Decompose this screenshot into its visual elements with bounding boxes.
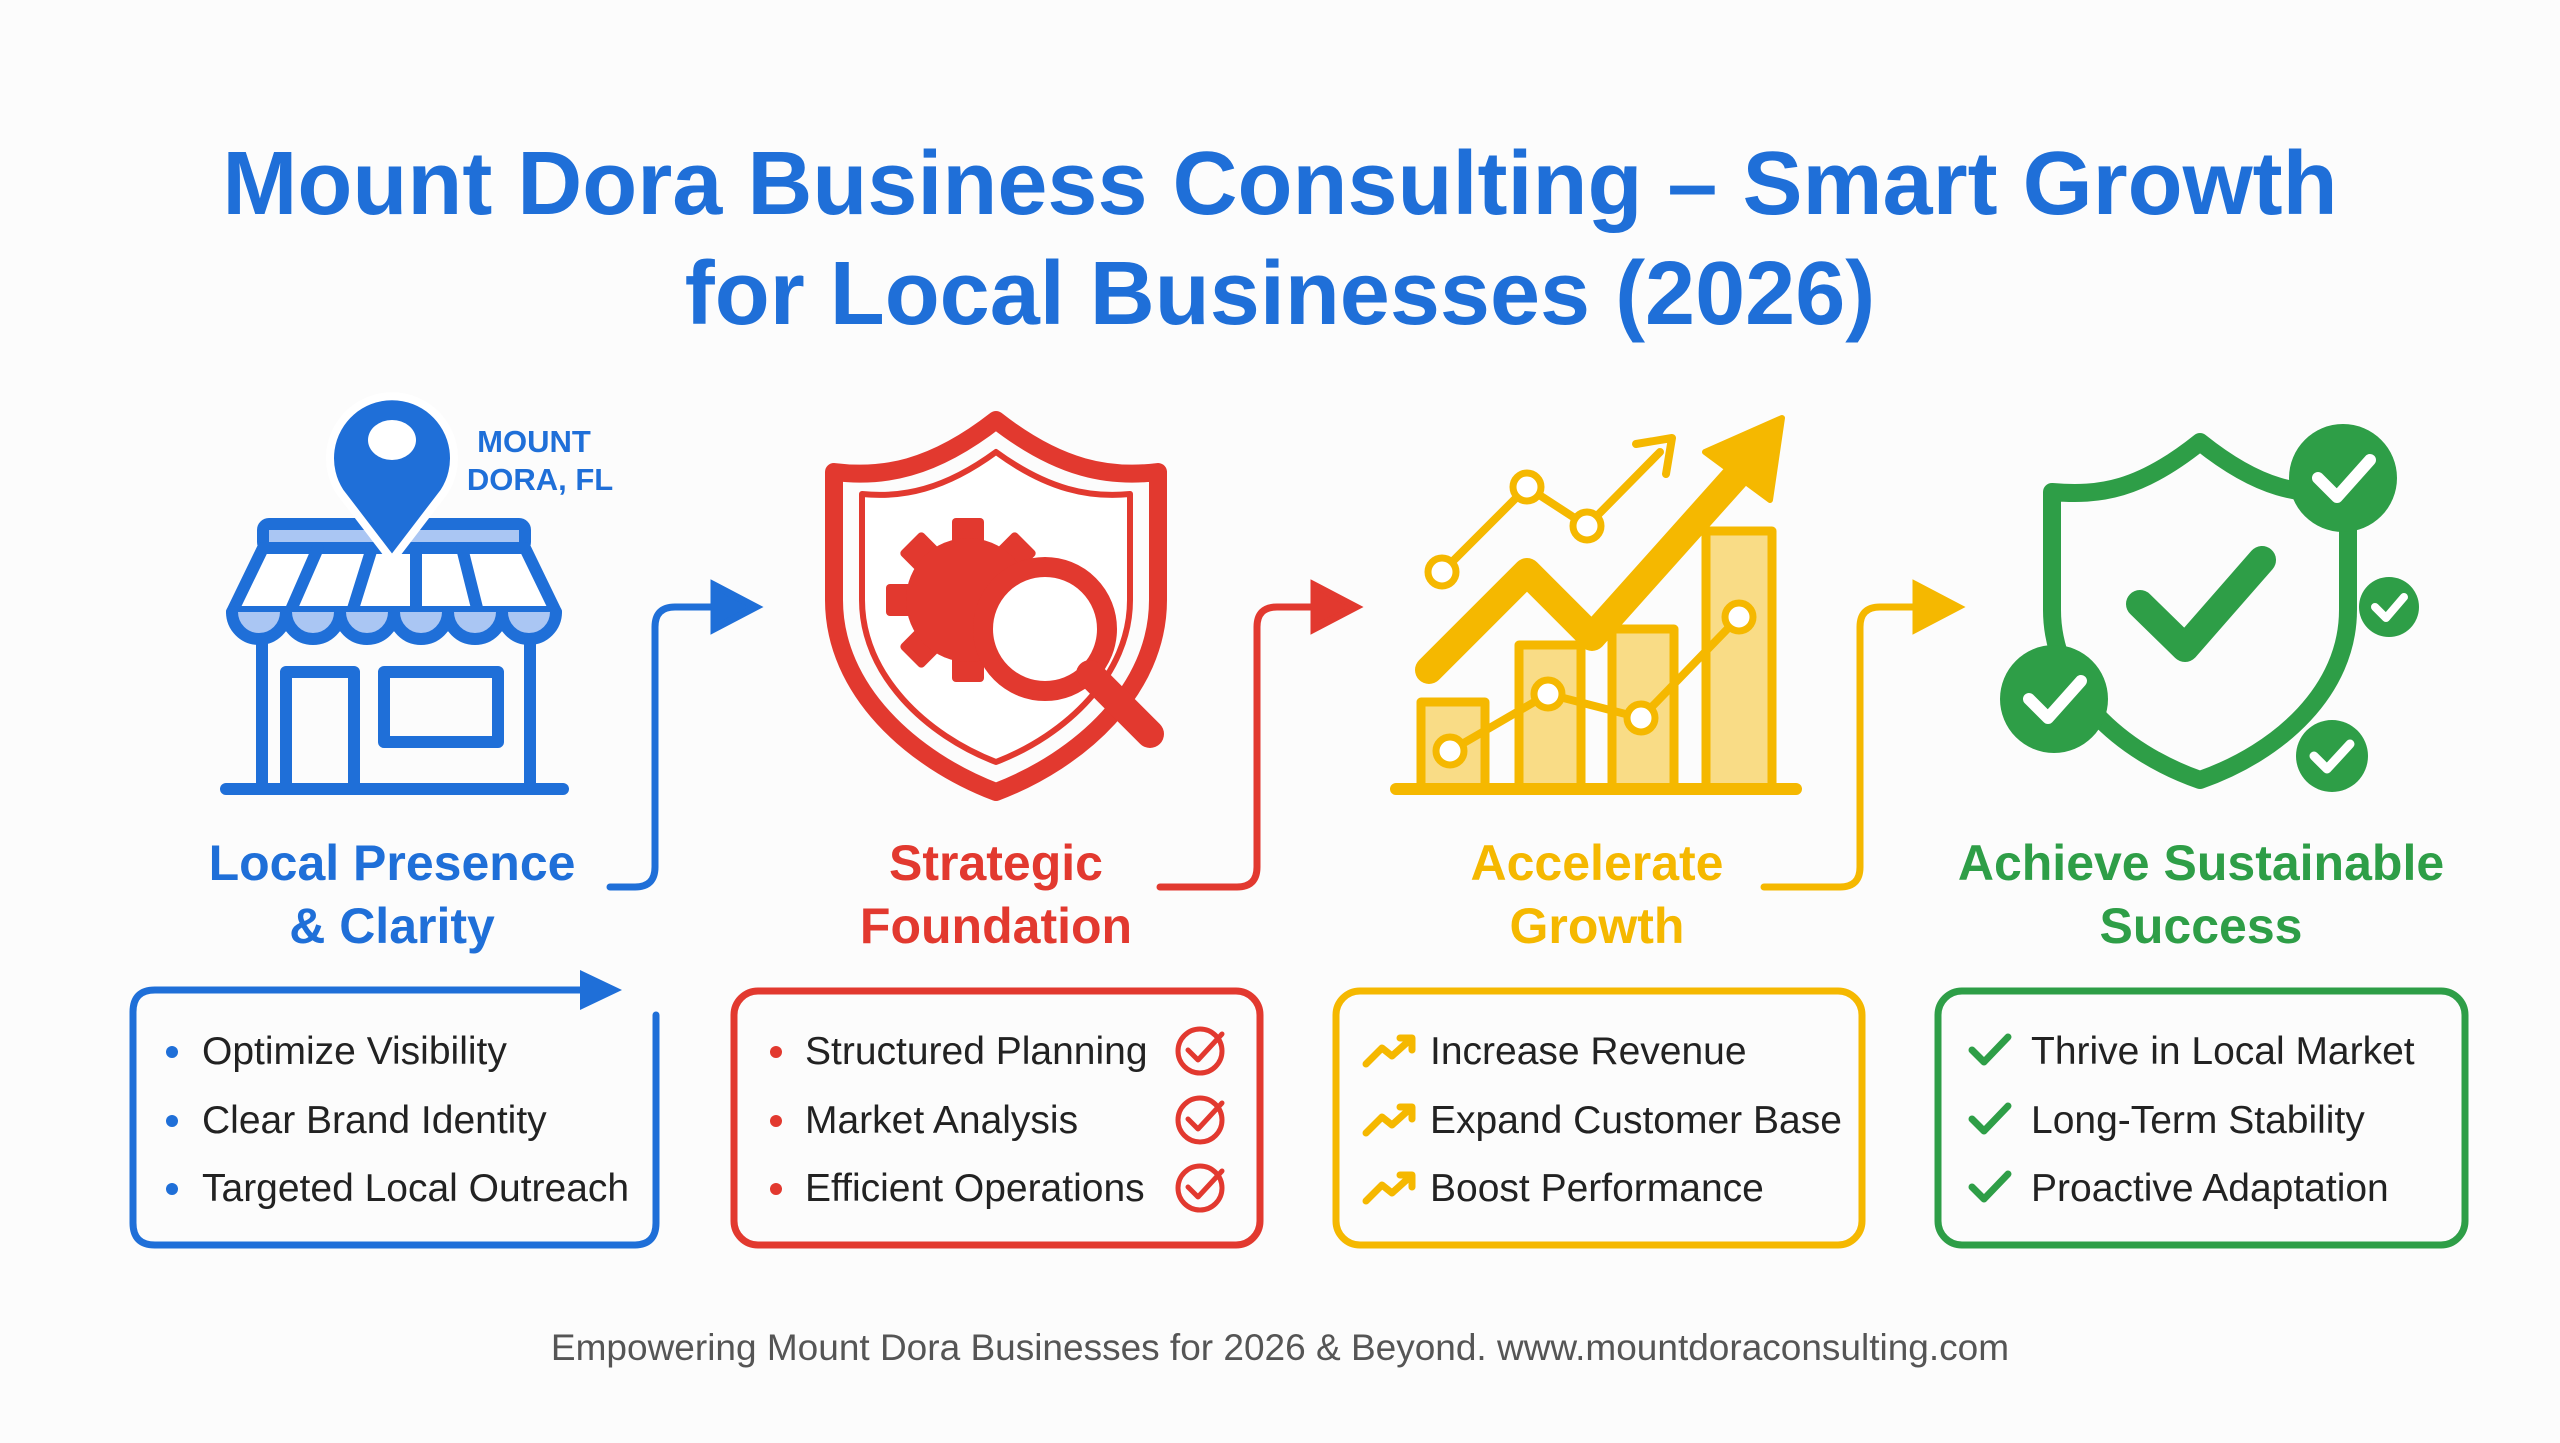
panel: accelerate growth list: Expand Customer Base — [1430, 1099, 1842, 1142]
heading: Strategic Foundation: Strategic — [889, 835, 1103, 891]
panel: sustainable success list: Long-Term Stability — [2031, 1099, 2365, 1142]
panel: strategic foundation list: Structured Planning — [805, 1030, 1148, 1073]
panel: accelerate growth list — [1336, 991, 1862, 1245]
title: for Local Businesses (2026) — [685, 244, 1875, 344]
icon: green shield with checks — [2000, 424, 2419, 792]
arrow: blue connector — [610, 585, 756, 887]
panel: strategic foundation list: Market Analysis — [805, 1099, 1078, 1142]
heading: Accelerate Growth: Accelerate — [1471, 835, 1723, 891]
icon: shield with gear and magnifier — [834, 420, 1158, 792]
icon: storefront with pin — [226, 396, 563, 789]
heading: Strategic Foundation: Foundation — [860, 898, 1132, 954]
panel: local presence list: Optimize Visibility — [202, 1030, 507, 1073]
arrow: yellow connector — [1764, 585, 1958, 887]
heading: Local Presence & Clarity: & Clarity — [289, 898, 495, 954]
panel: strategic foundation list — [734, 991, 1260, 1245]
heading: Achieve Sustainable Success: Success — [2100, 898, 2302, 954]
footer: Empowering Mount Dora Businesses for 2026 & Beyond. www.mountdoraconsulting.com — [551, 1327, 2009, 1368]
heading: Achieve Sustainable Success — [1958, 835, 2444, 954]
panel: local presence list: Targeted Local Outreach — [202, 1167, 629, 1210]
title — [222, 134, 2338, 344]
arrow: red connector — [1160, 585, 1356, 887]
panel: strategic foundation list: Efficient Operations — [805, 1167, 1145, 1210]
panel: accelerate growth list: Increase Revenue — [1430, 1030, 1747, 1073]
heading: Achieve Sustainable Success: Achieve Sustainable — [1958, 835, 2444, 891]
panel: sustainable success list: Proactive Adaptation — [2031, 1167, 2389, 1210]
label: Mount Dora, FL — [467, 424, 613, 497]
panel: accelerate growth list: Boost Performance — [1430, 1167, 1764, 1210]
panel: sustainable success list: Thrive in Local Market — [2031, 1030, 2415, 1073]
icon: growth chart — [1396, 418, 1796, 789]
panel: sustainable success list — [1938, 991, 2465, 1245]
label: Mount Dora, FL: MOUNT — [477, 424, 591, 459]
heading: Accelerate Growth: Growth — [1510, 898, 1684, 954]
heading: Accelerate Growth — [1471, 835, 1723, 954]
panel: local presence list — [133, 970, 656, 1245]
heading: Local Presence & Clarity — [209, 835, 575, 954]
heading: Strategic Foundation — [860, 835, 1132, 954]
label: Mount Dora, FL: DORA, FL — [467, 462, 613, 497]
panel: local presence list: Clear Brand Identity — [202, 1099, 547, 1142]
title: Mount Dora Business Consulting – Smart Growth — [222, 134, 2338, 234]
heading: Local Presence & Clarity: Local Presence — [209, 835, 575, 891]
